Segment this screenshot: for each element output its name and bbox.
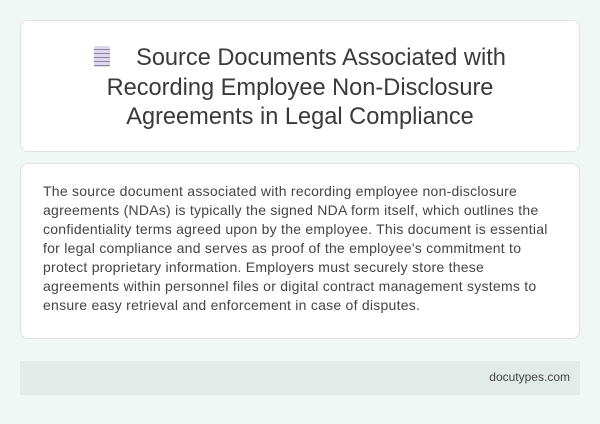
- panel: description: [20, 163, 580, 339]
- panel: title card: [20, 20, 580, 152]
- title: Agreements in Legal Compliance: [126, 104, 474, 130]
- icon: document: [94, 46, 110, 67]
- footer text: docutypes.com: [489, 370, 570, 384]
- footer: [20, 361, 580, 395]
- text block: The source document associated with recording employee non-disclosure agreements (NDAs) is typically the signed NDA form itself, which outlines the confidentiality terms agreed upon by the employee. This document is essential for legal compliance and serves as proof of the employee's commitment to protect proprietary information. Employers must securely store these agreements within personnel files or digital contract management systems to ensure easy retrieval and enforcement in case of disputes.: [43, 183, 548, 313]
- title: Source Documents Associated with: [136, 45, 506, 71]
- title: Recording Employee Non-Disclosure: [107, 74, 493, 100]
- title: [94, 45, 506, 130]
